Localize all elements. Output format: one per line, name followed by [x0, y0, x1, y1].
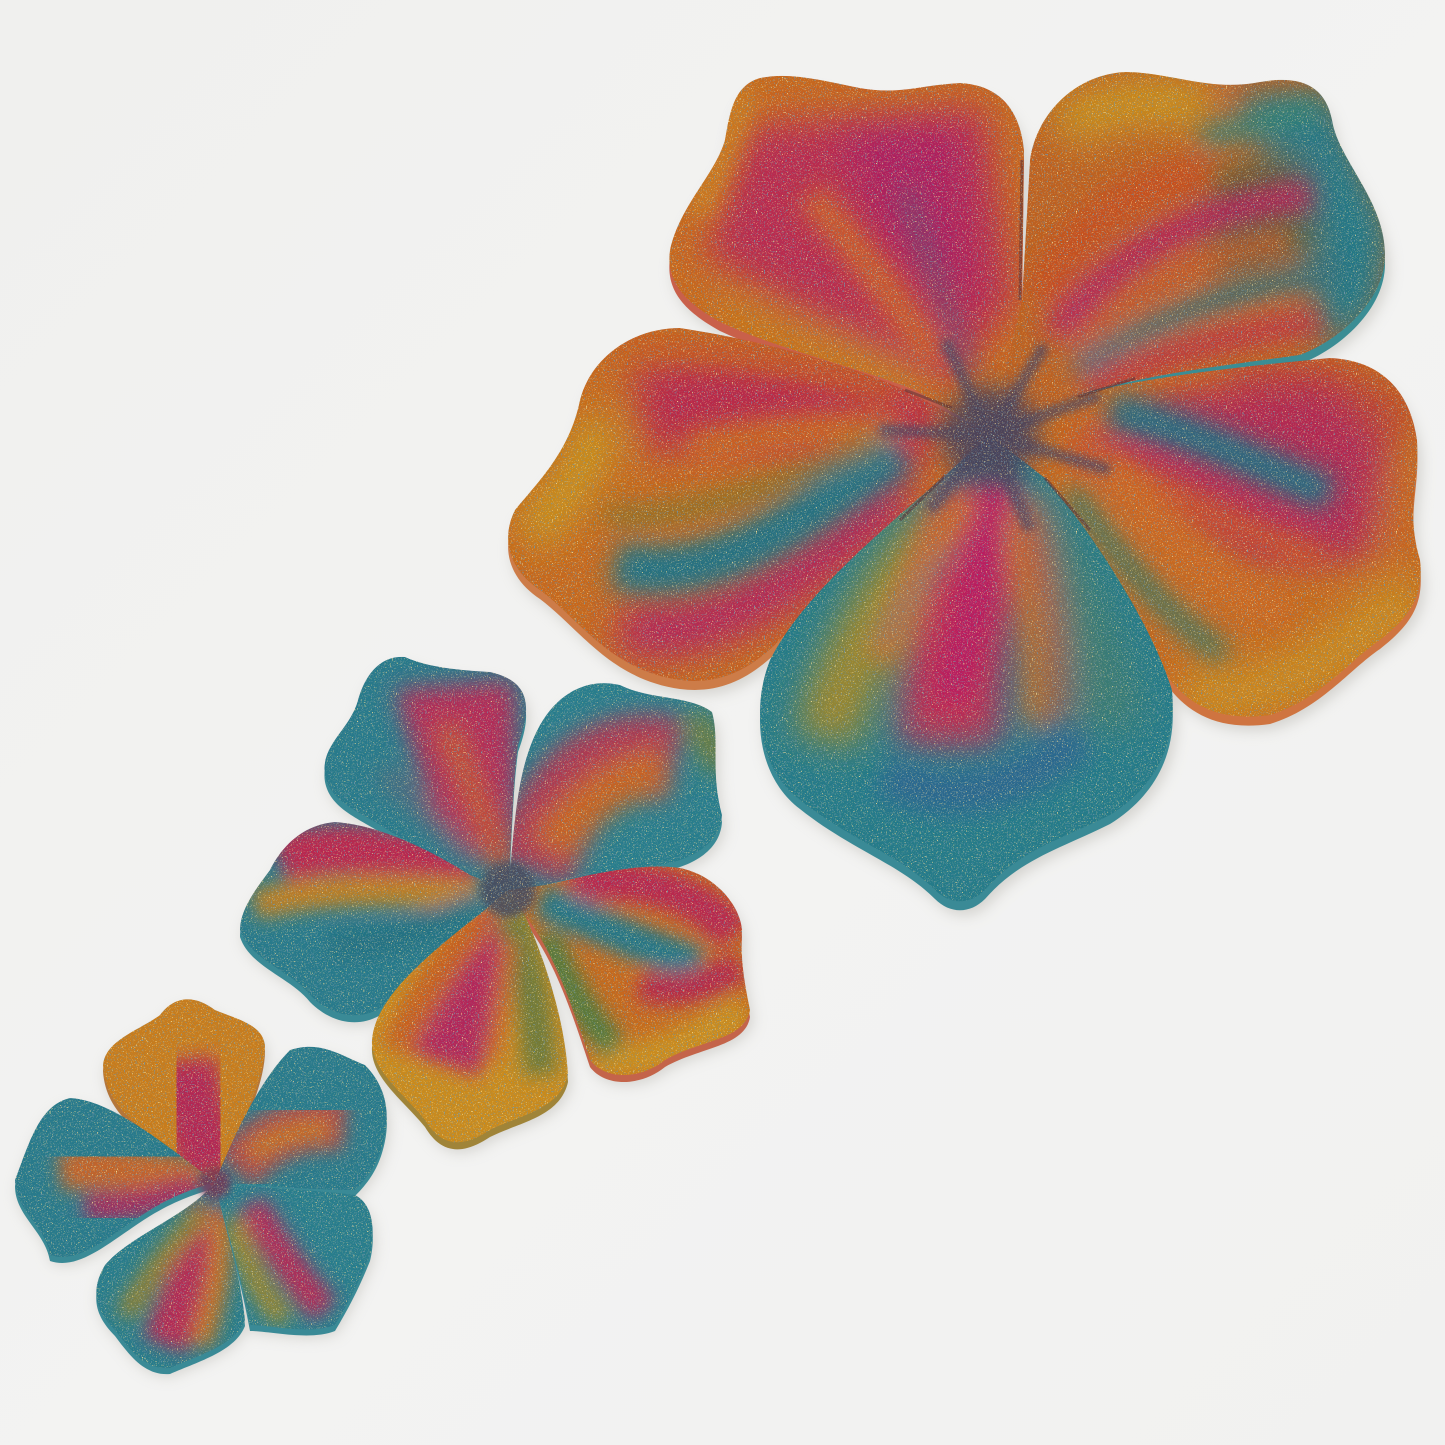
medium flower centre	[480, 862, 536, 918]
large petal: bottom	[760, 435, 1173, 901]
medium flower	[240, 657, 753, 1152]
medium petal: left	[240, 822, 508, 1015]
small petal: bottom	[96, 1182, 245, 1368]
large petal: upper left	[669, 76, 1024, 435]
small flower shadow and resin edge	[15, 1005, 389, 1376]
small petal: upper right	[215, 1047, 387, 1190]
large petal: right	[990, 358, 1421, 717]
large petal: upper right	[990, 72, 1395, 435]
large petal: left	[508, 328, 990, 681]
large flower centre	[880, 160, 1135, 530]
small petal: top	[103, 999, 265, 1182]
medium petal: upper right	[508, 683, 722, 890]
small flower centre	[199, 1167, 231, 1199]
large flower	[508, 72, 1425, 915]
medium petal: bottom	[372, 890, 568, 1142]
large flower shadow and resin edge	[508, 81, 1425, 915]
small petal: left	[15, 1098, 215, 1257]
medium petal: right	[508, 866, 750, 1075]
small petal: lower right	[215, 1182, 373, 1329]
medium petal: upper left	[324, 657, 526, 890]
medium flower shadow and resin edge	[240, 664, 753, 1152]
small flower	[15, 999, 389, 1376]
